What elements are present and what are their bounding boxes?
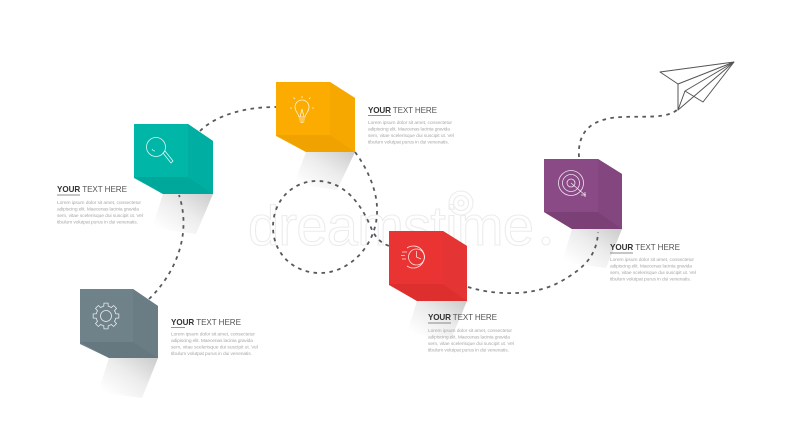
text block: purple step: YOUR TEXT HERE (610, 243, 681, 252)
step: gray gear cube (80, 289, 158, 358)
text block: orange step: tibulum volutpat purus in dui venenatis. (368, 140, 449, 146)
text block: purple step: Lorem ipsum dolor sit amet, consectetur (610, 257, 694, 263)
icon: magnifier (146, 138, 173, 163)
dashed path: teal to orange (200, 107, 276, 131)
step: orange lightbulb cube (276, 82, 355, 152)
text block: orange step: sem, vitae scelerisque dui suscipit ut. Vel (368, 133, 454, 139)
text block: gray step: adipiscing elit. Maecenas lacinia gravida (171, 338, 253, 344)
text block: red step (428, 313, 514, 354)
dashed path: gray to teal (149, 195, 184, 299)
step: teal magnifier cube (134, 124, 213, 194)
text block: orange step: YOUR TEXT HERE (368, 106, 438, 115)
text block: teal step: YOUR TEXT HERE (57, 185, 128, 194)
text block: red step: Lorem ipsum dolor sit amet, consectetur (428, 328, 512, 334)
text block: gray step: YOUR TEXT HERE (171, 318, 242, 327)
text block: orange step (368, 106, 454, 146)
icon: gear (93, 303, 119, 329)
text block: gray step (171, 318, 258, 357)
text block: purple step: tibulum volutpat purus in dui venenatis. (610, 276, 691, 282)
text block: red step: YOUR TEXT HERE (428, 313, 498, 322)
text block: red step: adipiscing elit. Maecenas lacinia gravida (428, 334, 510, 340)
text block: teal step: adipiscing elit. Maecenas lacinia gravida (57, 206, 139, 212)
text block: teal step (57, 185, 143, 226)
text block: orange step: Lorem ipsum dolor sit amet, consectetur (368, 120, 452, 126)
step: purple target cube (544, 159, 622, 229)
step: red clock cube (389, 231, 467, 301)
text block: red step: sem, vitae scelerisque dui suscipit ut. Vel (428, 341, 514, 347)
dashed path: orange through loop to red (273, 152, 389, 273)
text block: teal step: sem, vitae scelerisque dui suscipit ut. Vel (57, 213, 143, 219)
icon: lightbulb (290, 96, 314, 122)
dashed path: purple to plane (579, 109, 678, 157)
icon: target (558, 170, 586, 197)
text block: gray step: sem, vitae scelerisque dui suscipit ut. Vel (171, 344, 258, 350)
text block: gray step: tibulum volutpat purus in dui venenatis. (171, 351, 252, 357)
text block: purple step (610, 243, 696, 282)
icon: paper plane (660, 62, 734, 110)
text block: purple step: sem, vitae scelerisque dui suscipit ut. Vel (610, 270, 696, 276)
text block: teal step: tibulum volutpat purus in dui venenatis. (57, 220, 138, 226)
dashed path: red to purple (468, 232, 598, 293)
text block: teal step: Lorem ipsum dolor sit amet, consectetur (57, 200, 141, 206)
text block: orange step: adipiscing elit. Maecenas lacinia gravida (368, 126, 450, 132)
cast shadows under cubes (98, 152, 622, 398)
text block: red step: tibulum volutpat purus in dui venenatis. (428, 348, 509, 354)
watermark: dreamstime: dreamstime (248, 194, 534, 257)
text block: gray step: Lorem ipsum dolor sit amet, consectetur (171, 332, 255, 338)
text block: purple step: adipiscing elit. Maecenas lacinia gravida (610, 264, 692, 270)
icon: clock (401, 246, 424, 268)
